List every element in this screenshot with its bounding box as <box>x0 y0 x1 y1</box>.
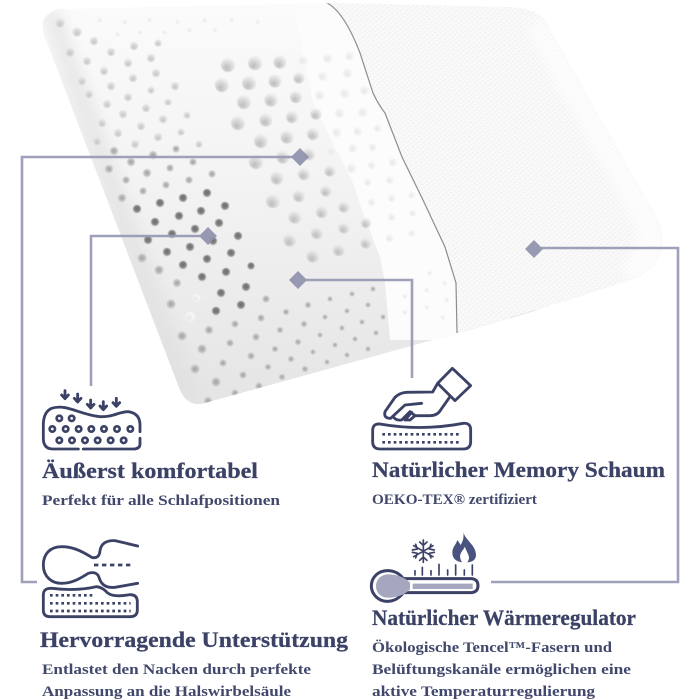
text: temperature detail: Belüftungskanäle ermöglichen eine <box>372 662 631 678</box>
text: comfort detail: Perfekt für alle Schlafpositionen <box>42 493 281 509</box>
text: certification: OEKO-TEX® zertifiziert <box>372 492 537 508</box>
leader line: top left <box>22 148 309 582</box>
text: support detail: Anpassung an die Halswirbelsäule <box>42 684 291 700</box>
foam holes: centre left <box>105 146 220 386</box>
icon: foam with pressure arrows <box>43 391 140 449</box>
foam holes: faint top rows <box>98 19 259 36</box>
leader line: memory foam <box>289 271 412 378</box>
text: support detail: Entlastet den Nacken durch perfekte <box>42 662 311 678</box>
heading: temperature: Natürlicher Wärmeregulator <box>372 605 636 630</box>
text: temperature detail <box>372 639 631 700</box>
leader line: comfort <box>91 227 217 386</box>
foam holes: lower rows <box>204 286 386 405</box>
foam holes: dark centre <box>133 189 254 315</box>
foam holes: pale strip <box>185 52 450 322</box>
icon: thermometer with snowflake and flame <box>371 532 478 601</box>
foam holes <box>56 18 450 405</box>
foam holes: large <box>215 56 372 262</box>
leader line: temperature <box>491 240 678 582</box>
pillow foam core <box>96 94 432 404</box>
cover rim highlight <box>535 26 662 276</box>
icon: hand pressing foam <box>373 368 471 449</box>
pillow photo <box>30 0 680 410</box>
text: temperature detail: Ökologische Tencel™-Fasern und <box>372 639 613 656</box>
icon: head on pillow <box>43 541 138 617</box>
text: temperature detail: aktive Temperaturregulierung <box>372 684 596 700</box>
heading: memory foam: Natürlicher Memory Schaum <box>372 457 665 482</box>
pillow knit cover <box>322 0 680 340</box>
dark underside sliver <box>462 310 537 332</box>
cover seam <box>322 1 457 333</box>
text: support detail <box>42 662 311 700</box>
foam holes: upper left <box>56 18 202 148</box>
heading: support: Hervorragende Unterstützung <box>40 627 348 652</box>
heading: comfort: Äußerst komfortabel <box>42 458 258 483</box>
